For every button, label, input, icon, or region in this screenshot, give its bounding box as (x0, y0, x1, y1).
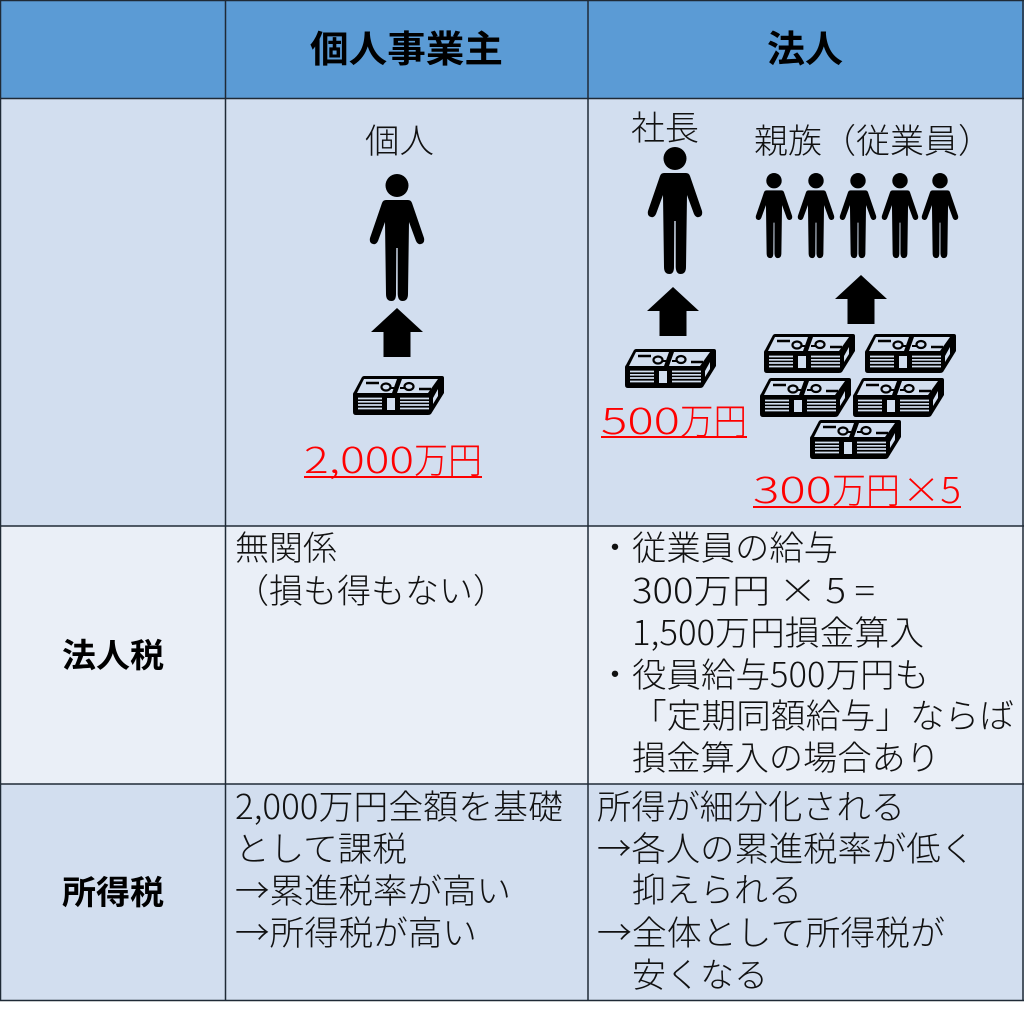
amount: 5 million yen: 500 (601, 393, 680, 445)
panel: sole proprietor illustration (304, 114, 482, 484)
arrow: up (371, 308, 423, 357)
text: income tax, sole proprietor: →累進税率が高い (235, 864, 511, 913)
icons: five employees (756, 173, 958, 258)
amount: 3 million yen times 5: 万円 (832, 462, 900, 514)
icon: person (370, 174, 424, 301)
text: income tax, corporation: →各人の累進税率が低く (597, 822, 975, 871)
arrow: up to employees (835, 275, 887, 324)
label: relatives (employees): 親族（従業員） (754, 114, 992, 163)
text: income tax, sole proprietor (235, 780, 563, 955)
amount: 20 million yen (304, 432, 482, 484)
amount: 5 million yen (601, 393, 747, 445)
text: income tax, corporation: →全体として所得税が (597, 906, 945, 955)
text: corporate tax, sole proprietor: （損も得もない） (235, 564, 507, 613)
text: corporate tax, corporation: 「定期同額給与」ならば (632, 689, 1014, 738)
text: corporate tax, corporation: ・ (598, 521, 632, 570)
icon: money stack (353, 376, 444, 415)
header row background (0, 0, 1024, 98)
icon: president (648, 147, 702, 274)
text: corporate tax, sole proprietor: 無関係 (235, 521, 337, 570)
arrow: up to president (647, 287, 699, 336)
row label: corporate tax: 法人税 (62, 629, 164, 677)
heading: sole proprietor: 個人事業主 (310, 19, 503, 73)
text: corporate tax, corporation: 損金算入の場合あり (632, 731, 940, 780)
heading: corporation: 法人 (767, 19, 843, 73)
text: corporate tax, corporation: 300万円 × 5 = (632, 564, 875, 613)
text: corporate tax, corporation: ・ (598, 648, 632, 697)
text: income tax, sole proprietor: 2,000万円全額を基礎 (235, 780, 563, 829)
text: corporate tax, corporation (598, 521, 1014, 780)
amount: 3 million yen times 5: 300 (753, 462, 832, 514)
label: president: 社長 (631, 101, 699, 150)
text: income tax, corporation (597, 780, 975, 997)
illustration row background (0, 98, 1024, 526)
row label: income tax: 所得税 (62, 866, 164, 914)
text: income tax, corporation: 抑えられる (632, 863, 802, 912)
amount: 3 million yen times 5: ×5 (902, 462, 961, 514)
amount: 5 million yen: 万円 (680, 393, 747, 445)
text: income tax, corporation: 所得が細分化される (597, 780, 905, 829)
amount: 20 million yen: 万円 (414, 432, 482, 484)
text: income tax, corporation: 安くなる (632, 948, 768, 997)
text: corporate tax, sole proprietor (235, 521, 507, 613)
corporate tax row background (0, 526, 1024, 784)
icon: president money (625, 349, 716, 388)
amount: 20 million yen: 2,000 (304, 432, 414, 484)
income tax row background (0, 784, 1024, 1000)
amount: 3 million yen times 5 (753, 462, 961, 514)
text: income tax, sole proprietor: として課税 (235, 822, 407, 871)
text: corporate tax, corporation: 従業員の給与 (632, 521, 838, 570)
text: corporate tax, corporation: 1,500万円損金算入 (632, 606, 924, 655)
panel: corporation illustration (601, 101, 992, 514)
label: individual: 個人 (365, 114, 434, 163)
icons: five money stacks (760, 334, 956, 459)
text: corporate tax, corporation: 役員給与500万円も (632, 648, 929, 697)
text: income tax, sole proprietor: →所得税が高い (235, 906, 477, 955)
